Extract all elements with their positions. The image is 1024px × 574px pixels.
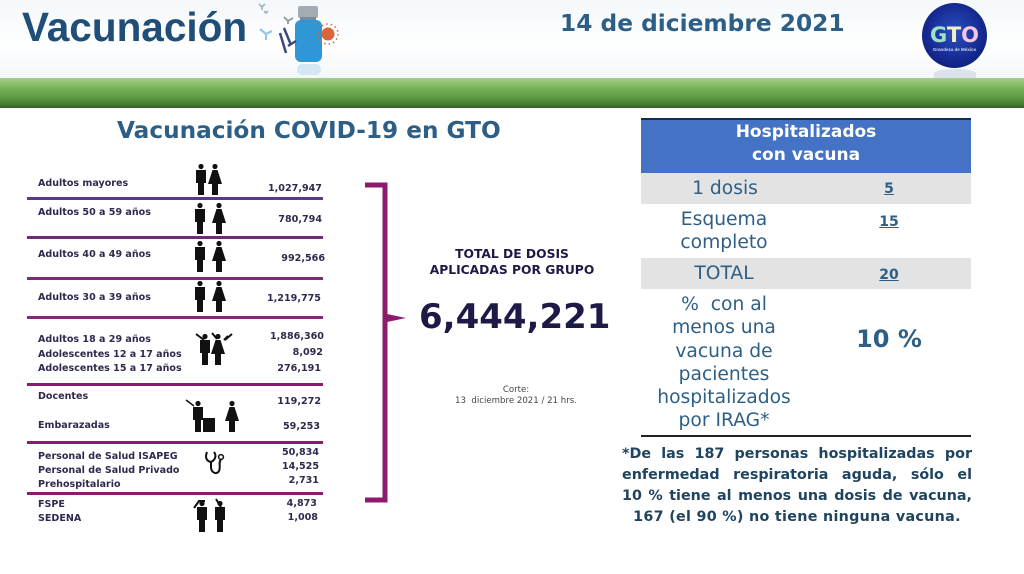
row value: 1 dosis: 5 <box>884 181 894 197</box>
footnote: *De las 187 personas hospitalizadas por <box>622 446 972 462</box>
group labels: FSPE <box>38 499 65 510</box>
logo reflection <box>934 69 976 78</box>
bottom rule <box>641 435 971 437</box>
group values: 1,027,947 <box>268 183 322 194</box>
cutoff note: Corte: <box>503 385 529 395</box>
grey row <box>641 173 971 204</box>
row label: percent: por IRAG* <box>679 410 769 431</box>
bracket arrow <box>365 182 406 502</box>
cutoff note <box>455 385 577 406</box>
logo tagline: Grandeza de México <box>933 47 976 52</box>
row label: esquema completo <box>680 209 768 253</box>
group labels: Embarazadas <box>38 420 110 431</box>
header background <box>0 0 1024 78</box>
row label: percent: hospitalizados <box>657 387 791 408</box>
row value: esquema completo: 15 <box>879 214 899 230</box>
group labels: Docentes <box>38 391 88 402</box>
row label: percent <box>657 294 791 431</box>
table header: con vacuna <box>752 145 860 165</box>
row label: esquema completo: Esquema <box>681 209 767 230</box>
group values <box>267 183 325 523</box>
row label: percent: menos una <box>672 317 776 338</box>
group labels: Prehospitalario <box>38 479 121 490</box>
group labels: Adultos 18 a 29 años <box>38 334 151 345</box>
group labels <box>38 178 182 524</box>
group labels: Adolescentes 15 a 17 años <box>38 363 182 374</box>
row label: esquema completo: completo <box>680 232 768 253</box>
footnote: enfermedad respiratoria aguda, sólo el <box>622 467 972 483</box>
group values: 50,834 <box>282 447 319 458</box>
group labels: Adolescentes 12 a 17 años <box>38 349 182 360</box>
row label: percent: vacuna de <box>675 341 773 362</box>
group values: 1,008 <box>288 512 318 523</box>
total label: APLICADAS POR GRUPO <box>430 263 594 277</box>
cutoff note: 13 diciembre 2021 / 21 hrs. <box>455 396 577 406</box>
footnote: 10 % tiene al menos una dosis de vacuna, <box>622 488 972 504</box>
group labels: Personal de Salud Privado <box>38 465 179 476</box>
group values: 8,092 <box>293 347 323 358</box>
panel: hospitalized table <box>641 118 971 437</box>
table header <box>641 118 971 173</box>
logo wordmark: GTO <box>930 23 979 47</box>
group labels: Personal de Salud ISAPEG <box>38 451 178 462</box>
group values: 4,873 <box>287 498 317 509</box>
group values: 992,566 <box>281 253 325 264</box>
panel: groups table <box>27 164 325 532</box>
group values: 119,272 <box>277 396 321 407</box>
total label <box>430 247 594 277</box>
group labels: Adultos 40 a 49 años <box>38 249 151 260</box>
row label: percent: % con al <box>681 294 767 315</box>
main title: Vacunación <box>22 4 247 50</box>
group values: 1,219,775 <box>267 293 321 304</box>
group values: 1,886,360 <box>270 331 324 342</box>
total label: TOTAL DE DOSIS <box>455 247 569 261</box>
group values: 2,731 <box>289 475 319 486</box>
footnote: 167 (el 90 %) no tiene ninguna vacuna. <box>633 509 961 525</box>
footnote <box>622 446 972 525</box>
total number: 6,444,221 <box>419 297 610 337</box>
group values: 276,191 <box>277 363 321 374</box>
row label: percent: pacientes <box>679 364 769 385</box>
group values: 14,525 <box>282 461 319 472</box>
group labels: Adultos 50 a 59 años <box>38 207 151 218</box>
icons: people <box>186 164 239 532</box>
table header: Hospitalizados <box>736 122 876 142</box>
icon: vaccine vial <box>258 4 339 75</box>
row label: 1 dosis: 1 dosis <box>692 178 758 199</box>
section heading: Vacunación COVID-19 en GTO <box>117 117 501 144</box>
row value: total: 20 <box>879 267 899 283</box>
date heading: 14 de diciembre 2021 <box>560 10 845 37</box>
group labels: SEDENA <box>38 513 81 524</box>
row label: total: TOTAL <box>694 263 754 284</box>
group labels: Adultos 30 a 39 años <box>38 292 151 303</box>
row value: percent: 10 % <box>856 325 922 353</box>
green banner <box>0 78 1024 108</box>
group values: 59,253 <box>283 421 320 432</box>
group labels: Adultos mayores <box>38 178 128 189</box>
icon: GTO logo <box>922 3 987 68</box>
grey row <box>641 258 971 289</box>
group values: 780,794 <box>278 214 322 225</box>
